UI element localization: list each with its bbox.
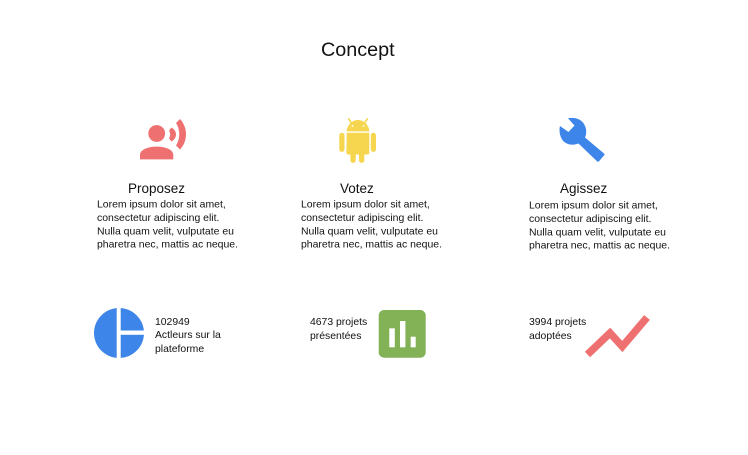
- text: presented count: présentées: [310, 331, 361, 342]
- heading: Votez: Votez: [340, 181, 374, 196]
- text: presented count: 4673 projets: [310, 317, 367, 328]
- icon: wrench: [560, 118, 604, 162]
- text block: Proposez: Lorem ipsum dolor sit amet,: [97, 200, 226, 210]
- panel: Votez: [301, 118, 442, 251]
- panel: Proposez: [97, 119, 238, 251]
- text: actors count: 102949: [155, 317, 190, 328]
- text block: Votez: pharetra nec, mattis ac neque.: [301, 240, 442, 251]
- text: adopted count: adoptées: [529, 331, 572, 342]
- title: Concept: [321, 39, 395, 61]
- stat: presented projects: [310, 310, 426, 358]
- text block: Votez: Nulla quam velit, vulputate eu: [301, 226, 438, 237]
- text: adopted count: 3994 projets: [529, 317, 586, 328]
- text block: Votez: Lorem ipsum dolor sit amet,: [301, 200, 430, 210]
- heading: Agissez: Agissez: [560, 181, 608, 196]
- text block: Agissez: pharetra nec, mattis ac neque.: [529, 241, 670, 252]
- icon: pie chart: [94, 306, 146, 360]
- stat: actors: [94, 306, 224, 360]
- text: actors count: plateforme: [155, 344, 204, 355]
- text: actors count: Actleurs sur la: [155, 330, 221, 341]
- icon: person speaking: [140, 119, 186, 159]
- icon: android: [339, 118, 376, 163]
- text block: Proposez: pharetra nec, mattis ac neque.: [97, 240, 238, 251]
- icon: bar chart: [379, 310, 426, 358]
- text block: Proposez: Nulla quam velit, vulputate eu: [97, 226, 234, 237]
- panel: Agissez: [529, 118, 670, 252]
- icon: trend line: [588, 318, 647, 354]
- text block: Agissez: consectetur adipiscing elit.: [529, 214, 651, 225]
- text block: Proposez: consectetur adipiscing elit.: [97, 213, 219, 224]
- text block: Agissez: Lorem ipsum dolor sit amet,: [529, 200, 658, 212]
- heading: Proposez: Proposez: [128, 181, 185, 196]
- text block: Votez: consectetur adipiscing elit.: [301, 213, 423, 224]
- text block: Agissez: Nulla quam velit, vulputate eu: [529, 227, 666, 238]
- stat: adopted projects: [529, 317, 647, 354]
